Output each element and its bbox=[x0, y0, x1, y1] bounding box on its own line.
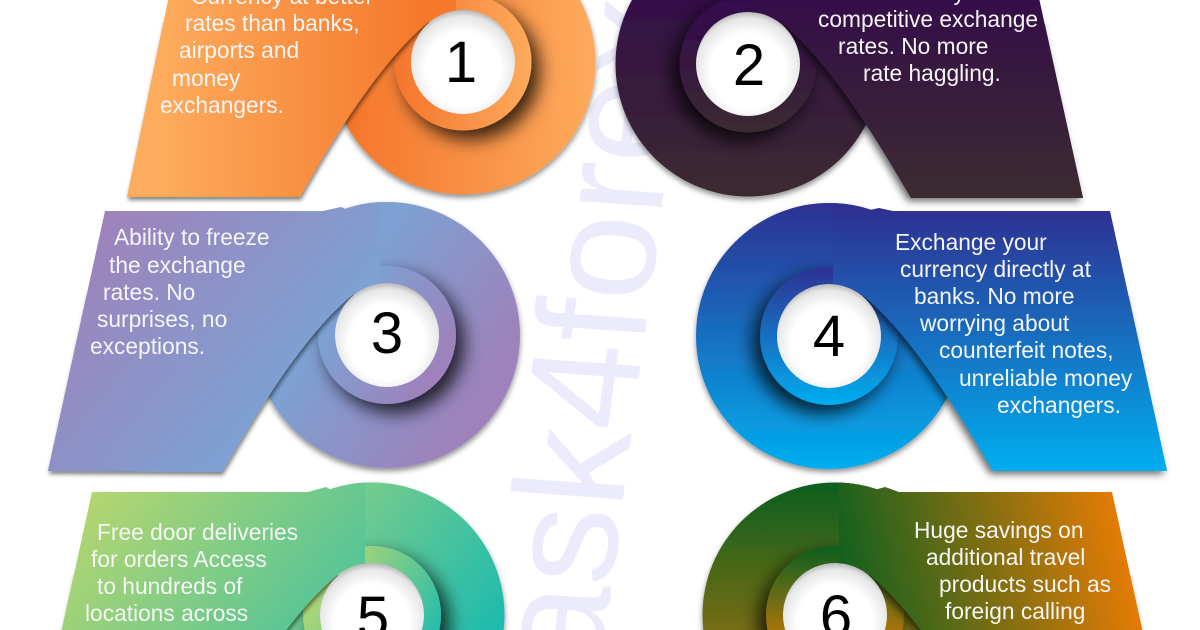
number 4: 4 bbox=[813, 304, 845, 369]
text block 2: competitive exchange bbox=[818, 6, 1038, 32]
ribbon band bbox=[127, 0, 456, 197]
text block 1: exchangers. bbox=[160, 92, 284, 118]
text block 1: rates than banks, bbox=[185, 10, 360, 36]
text block 6: products such as bbox=[939, 571, 1111, 597]
text block 3: Ability to freeze bbox=[114, 224, 270, 250]
text block 4: counterfeit notes, bbox=[939, 337, 1114, 363]
outer circle bbox=[254, 202, 520, 468]
text block 3: the exchange bbox=[109, 252, 246, 278]
ribbon shadow bbox=[862, 296, 1168, 480]
outer circle bbox=[702, 482, 968, 630]
ribbon band bbox=[839, 482, 1169, 630]
ring bbox=[318, 266, 456, 404]
text block 4: unreliable money bbox=[959, 365, 1133, 391]
number 2: 2 bbox=[733, 33, 765, 98]
ribbon band bbox=[833, 203, 1167, 471]
panel 2: competitive rates bbox=[616, 0, 1083, 198]
text block 2: rate haggling. bbox=[863, 60, 1001, 86]
text block 3: surprises, no bbox=[97, 306, 227, 332]
text block 3: exceptions. bbox=[90, 333, 205, 359]
text block 4: Exchange your bbox=[895, 229, 1047, 255]
ring bbox=[766, 546, 904, 630]
text block 5: Free door deliveries bbox=[97, 519, 298, 545]
number 1: 1 bbox=[445, 30, 477, 95]
outer circle bbox=[330, 0, 596, 194]
text block 1: airports and bbox=[179, 37, 299, 63]
panel 4: exchange at banks bbox=[696, 203, 1167, 471]
text block 6: foreign calling bbox=[945, 598, 1085, 624]
ring bbox=[303, 546, 441, 630]
text block 2 bbox=[818, 0, 1038, 86]
ribbon shadow bbox=[126, 22, 430, 203]
text block 3: rates. No bbox=[103, 279, 195, 305]
ribbon band bbox=[752, 0, 1083, 198]
text block 6: Huge savings on bbox=[914, 517, 1083, 543]
number disc bbox=[320, 563, 424, 630]
ring bbox=[394, 0, 532, 130]
ribbon shadow bbox=[46, 295, 354, 478]
outer circle bbox=[696, 203, 962, 469]
text block 6: additional travel bbox=[926, 544, 1085, 570]
text block 4: currency directly at bbox=[900, 256, 1092, 282]
panel 5: door deliveries bbox=[35, 482, 504, 630]
number disc bbox=[783, 563, 887, 630]
number disc bbox=[335, 283, 439, 387]
text block 2: rates. No more bbox=[838, 33, 988, 59]
panel 6: travel savings bbox=[702, 482, 1169, 630]
ribbon shadow bbox=[868, 575, 1144, 630]
number 3: 3 bbox=[371, 301, 403, 366]
number disc bbox=[411, 10, 515, 114]
text block 5 bbox=[85, 519, 298, 626]
panel 1: better rates bbox=[127, 0, 596, 197]
text block 4: worrying about bbox=[919, 310, 1070, 336]
text block 1 bbox=[160, 0, 374, 118]
panel 3: freeze rates bbox=[48, 202, 520, 472]
text block 4: exchangers. bbox=[997, 392, 1121, 418]
ribbon band bbox=[48, 202, 380, 472]
text block 1: money bbox=[172, 65, 241, 91]
ribbon band bbox=[35, 482, 365, 630]
number disc bbox=[777, 284, 881, 388]
text block 4 bbox=[895, 229, 1133, 418]
text block 5: locations across bbox=[85, 600, 248, 626]
ribbon shadow bbox=[60, 575, 338, 630]
outer circle bbox=[240, 482, 504, 630]
outer circle bbox=[616, 0, 880, 196]
number disc bbox=[696, 12, 800, 116]
text block 3 bbox=[90, 224, 270, 359]
ribbon shadow bbox=[782, 24, 1084, 207]
text block 5: to hundreds of bbox=[97, 573, 243, 599]
ring bbox=[760, 267, 898, 405]
ring bbox=[680, 0, 816, 132]
text block 6 bbox=[914, 517, 1111, 624]
text block 4: banks. No more bbox=[914, 283, 1075, 309]
text block 5: for orders Access bbox=[91, 546, 267, 572]
